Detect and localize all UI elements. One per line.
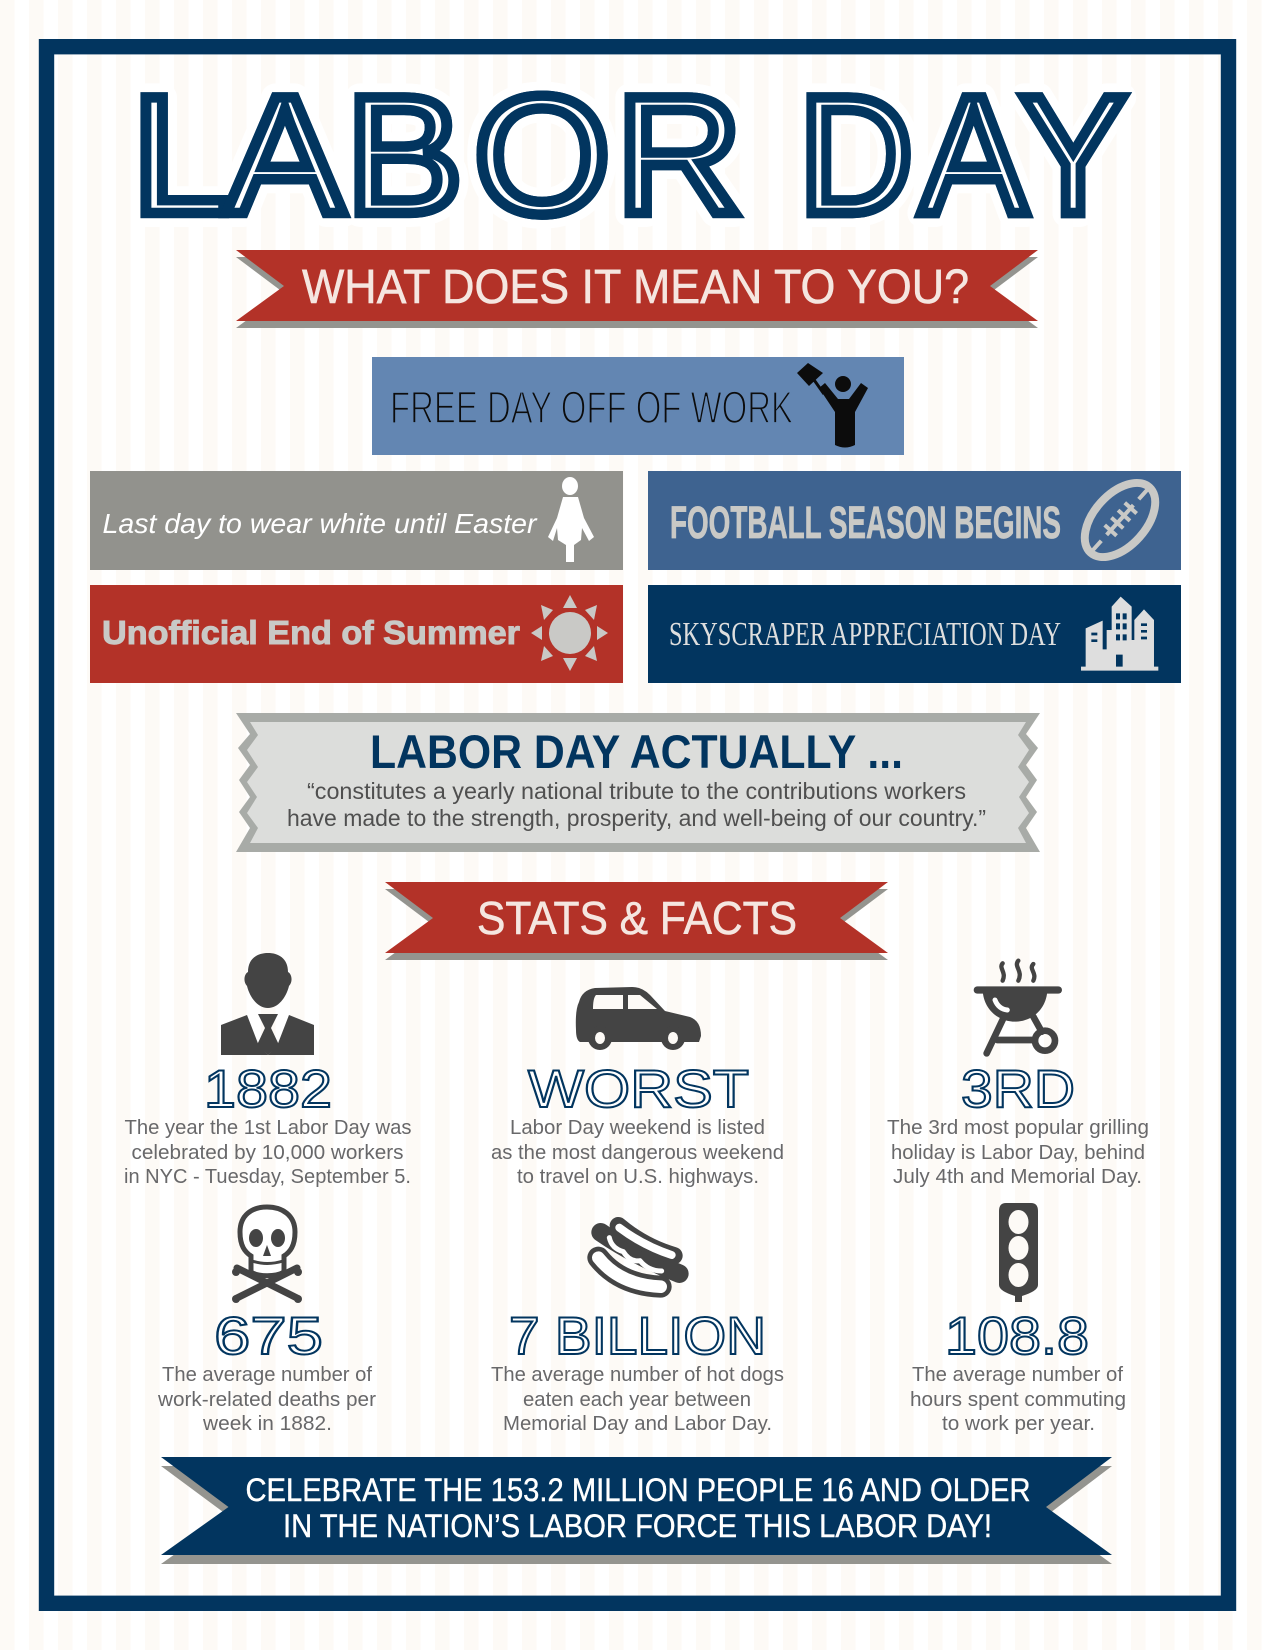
panel: labor day actually (236, 713, 1040, 852)
title: LABOR (131, 61, 743, 249)
icon: buildings (1081, 597, 1158, 671)
panel: labor day actually: “constitutes a yearly national tribute to the contributions workers (307, 778, 966, 804)
panel: unofficial end of summer: Unofficial End of Summer (102, 614, 520, 651)
panel: last day to wear white: Last day to wear white until Easter (102, 508, 538, 539)
stat: 7 billion: eaten each year between (523, 1388, 751, 1411)
stat: 108.8: 108.8 (945, 1307, 1089, 1366)
stat: worst (491, 987, 784, 1188)
stat: 1882: The year the 1st Labor Day was (124, 1116, 412, 1139)
stat: 675: The average number of (162, 1363, 372, 1386)
title (131, 61, 1126, 249)
ribbon: celebrate closing banner (161, 1457, 1112, 1564)
stat: 7 billion: 7 BILLION (509, 1307, 766, 1366)
stat: 108.8: hours spent commuting (910, 1388, 1126, 1411)
title: DAY (798, 61, 1126, 249)
ribbon: stats and facts: STATS & FACTS (477, 892, 797, 944)
stat: 7 billion (491, 1226, 784, 1435)
stat: 3rd (887, 961, 1149, 1188)
panel: unofficial end of summer (90, 585, 623, 683)
stat: worst: as the most dangerous weekend (491, 1141, 784, 1164)
icon: skull and crossbones (232, 1207, 302, 1303)
stat: worst: WORST (528, 1060, 749, 1119)
stat: 1882: in NYC - Tuesday, September 5. (124, 1165, 411, 1188)
stat: 7 billion: Memorial Day and Labor Day. (503, 1412, 772, 1435)
stat: 3rd: The 3rd most popular grilling (887, 1116, 1149, 1139)
stat: 7 billion: The average number of hot dogs (491, 1363, 784, 1386)
panel: labor day actually: LABOR DAY ACTUALLY ... (370, 725, 903, 778)
icon: grill (977, 961, 1058, 1053)
title: LABOR (131, 61, 743, 249)
stat: 675: 675 (214, 1307, 323, 1366)
icon: sun (531, 595, 608, 671)
stat: 675: week in 1882. (202, 1412, 332, 1435)
title: DAY (798, 61, 1126, 249)
ribbon: celebrate closing banner: CELEBRATE THE 153.2 MILLION PEOPLE 16 AND OLDER (246, 1472, 1030, 1508)
ribbon: what does it mean to you: WHAT DOES IT MEAN TO YOU? (302, 261, 969, 314)
stat: 675: work-related deaths per (157, 1388, 376, 1411)
panel: last day to wear white (90, 471, 623, 570)
ribbon: what does it mean to you (236, 250, 1038, 328)
icon: football (1071, 470, 1169, 570)
ribbon: stats and facts (385, 882, 888, 960)
icon: person waving flag (797, 363, 868, 448)
stat: worst: Labor Day weekend is listed (510, 1116, 765, 1139)
icon: hot dog (598, 1226, 679, 1287)
panel: free day off of work: FREE DAY OFF OF WORK (390, 382, 793, 433)
panel: labor day actually: have made to the strength, prosperity, and well-being of our country.” (287, 805, 986, 831)
panel: football season begins (648, 470, 1181, 570)
panel: skyscraper appreciation day: SKYSCRAPER APPRECIATION DAY (669, 616, 1061, 653)
stat: 108.8 (910, 1203, 1126, 1435)
ribbon: celebrate closing banner: IN THE NATION’S LABOR FORCE THIS LABOR DAY! (283, 1508, 992, 1544)
icon: car (576, 987, 701, 1050)
stat: 1882: 1882 (204, 1060, 332, 1119)
stat: 3rd: holiday is Labor Day, behind (891, 1141, 1145, 1164)
title: LABOR (131, 61, 743, 249)
stat: 3rd: July 4th and Memorial Day. (893, 1165, 1142, 1188)
icon: woman (548, 477, 594, 562)
stat: 3rd: 3RD (961, 1060, 1075, 1119)
panel: skyscraper appreciation day (648, 585, 1181, 683)
stat: 675 (157, 1207, 376, 1435)
icon: traffic light (999, 1203, 1038, 1302)
stat: 1882: celebrated by 10,000 workers (132, 1141, 404, 1164)
icon: man in suit (221, 953, 314, 1055)
stat: worst: to travel on U.S. highways. (517, 1165, 759, 1188)
stat: 108.8: to work per year. (942, 1412, 1095, 1435)
panel: free day off of work (372, 357, 904, 455)
title: DAY (798, 61, 1126, 249)
stat: 1882 (124, 953, 412, 1188)
stat: 108.8: The average number of (912, 1363, 1123, 1386)
